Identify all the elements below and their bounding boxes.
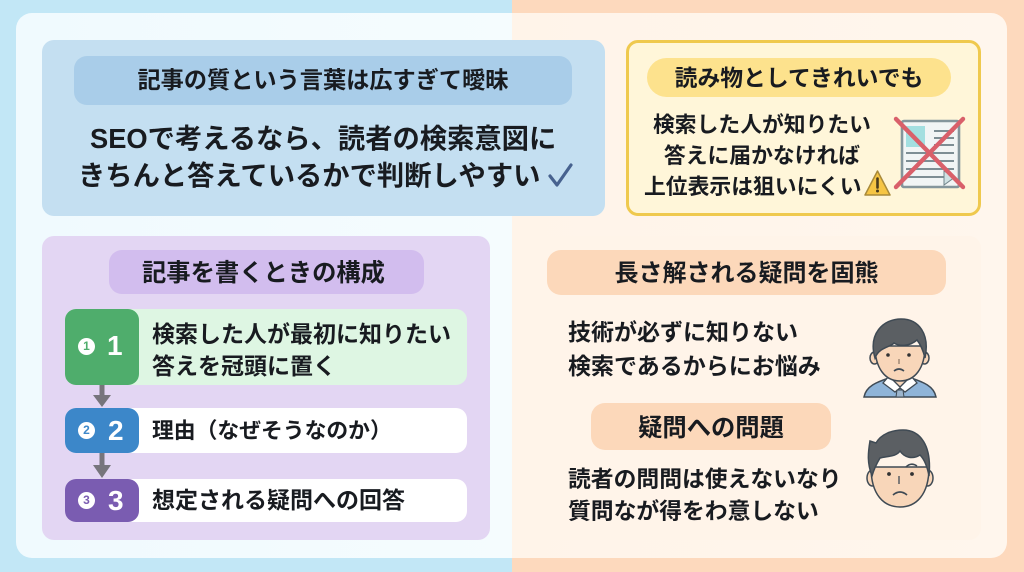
step 1 text: 答えを冠頭に置く bbox=[152, 353, 336, 379]
icon: troubled man face bbox=[866, 429, 934, 508]
heading: questions bbox=[547, 250, 946, 295]
step 1 bbox=[65, 309, 467, 385]
arrow: step 1 to 2 bbox=[93, 385, 111, 407]
step 1 text: 検索した人が最初に知りたい bbox=[152, 321, 451, 347]
text: SEO judgement bbox=[78, 123, 556, 191]
step 3 text: 想定される疑問への回答 bbox=[152, 487, 405, 513]
text: warning body: 答えに届かなければ bbox=[664, 143, 860, 168]
arrow: step 2 to 3 bbox=[93, 453, 111, 478]
step 3 bbox=[65, 479, 467, 522]
icon: check mark bbox=[548, 163, 573, 187]
icon: crossed out article bbox=[894, 116, 966, 190]
step 2 text: 理由（なぜそうなのか） bbox=[152, 418, 392, 443]
text: SEO judgement: きちんと答えているかで判断しやすい bbox=[78, 160, 540, 191]
icon: warning triangle bbox=[864, 170, 891, 196]
step 2 badge: 2 bbox=[108, 415, 124, 446]
text: second concern: 読者の問問は使えないなり bbox=[568, 466, 842, 492]
step 3 badge: 3 bbox=[83, 493, 90, 507]
heading: questions: 長さ解される疑問を固熊 bbox=[614, 260, 878, 287]
step 3 badge: 3 bbox=[108, 485, 124, 516]
icon: worried man in shirt bbox=[863, 318, 937, 398]
step 2 badge: 2 bbox=[83, 423, 90, 437]
step 2 badge bbox=[65, 408, 139, 453]
heading: problem with question: 疑問への問題 bbox=[638, 415, 784, 442]
text: second concern: 質問なが得をわ意しない bbox=[568, 498, 819, 524]
text: second concern bbox=[568, 466, 842, 524]
text: first concern: 技術が必ずに知りない bbox=[568, 319, 798, 345]
text: warning body: 検索した人が知りたい bbox=[653, 112, 871, 137]
heading: even if clean: 読み物としてきれいでも bbox=[675, 65, 923, 91]
heading: quality is vague: 記事の質という言葉は広すぎて曖昧 bbox=[138, 67, 508, 93]
text: warning body bbox=[644, 112, 871, 199]
heading: problem with question bbox=[591, 403, 831, 450]
heading: structure bbox=[109, 250, 424, 294]
heading: quality is vague bbox=[74, 56, 572, 105]
step 2 bbox=[65, 408, 467, 453]
text: warning body: 上位表示は狙いにくい bbox=[644, 174, 862, 199]
panel: article structure bbox=[42, 236, 490, 540]
step 1 badge: 1 bbox=[107, 330, 123, 361]
text: SEO judgement: SEOで考えるなら、読者の検索意図に bbox=[90, 123, 556, 154]
step 3 badge bbox=[65, 479, 139, 522]
step 1 badge bbox=[65, 309, 139, 385]
step 1 badge: 1 bbox=[83, 339, 90, 353]
panel: reader questions bbox=[513, 236, 981, 540]
step 1 text bbox=[152, 321, 451, 379]
heading: structure: 記事を書くときの構成 bbox=[142, 260, 385, 287]
text: first concern: 検索であるからにお悩み bbox=[568, 353, 821, 379]
text: first concern bbox=[568, 319, 821, 379]
panel: quality definition bbox=[42, 40, 605, 216]
panel: clean reading warning bbox=[626, 40, 981, 216]
heading: even if clean bbox=[647, 58, 951, 97]
